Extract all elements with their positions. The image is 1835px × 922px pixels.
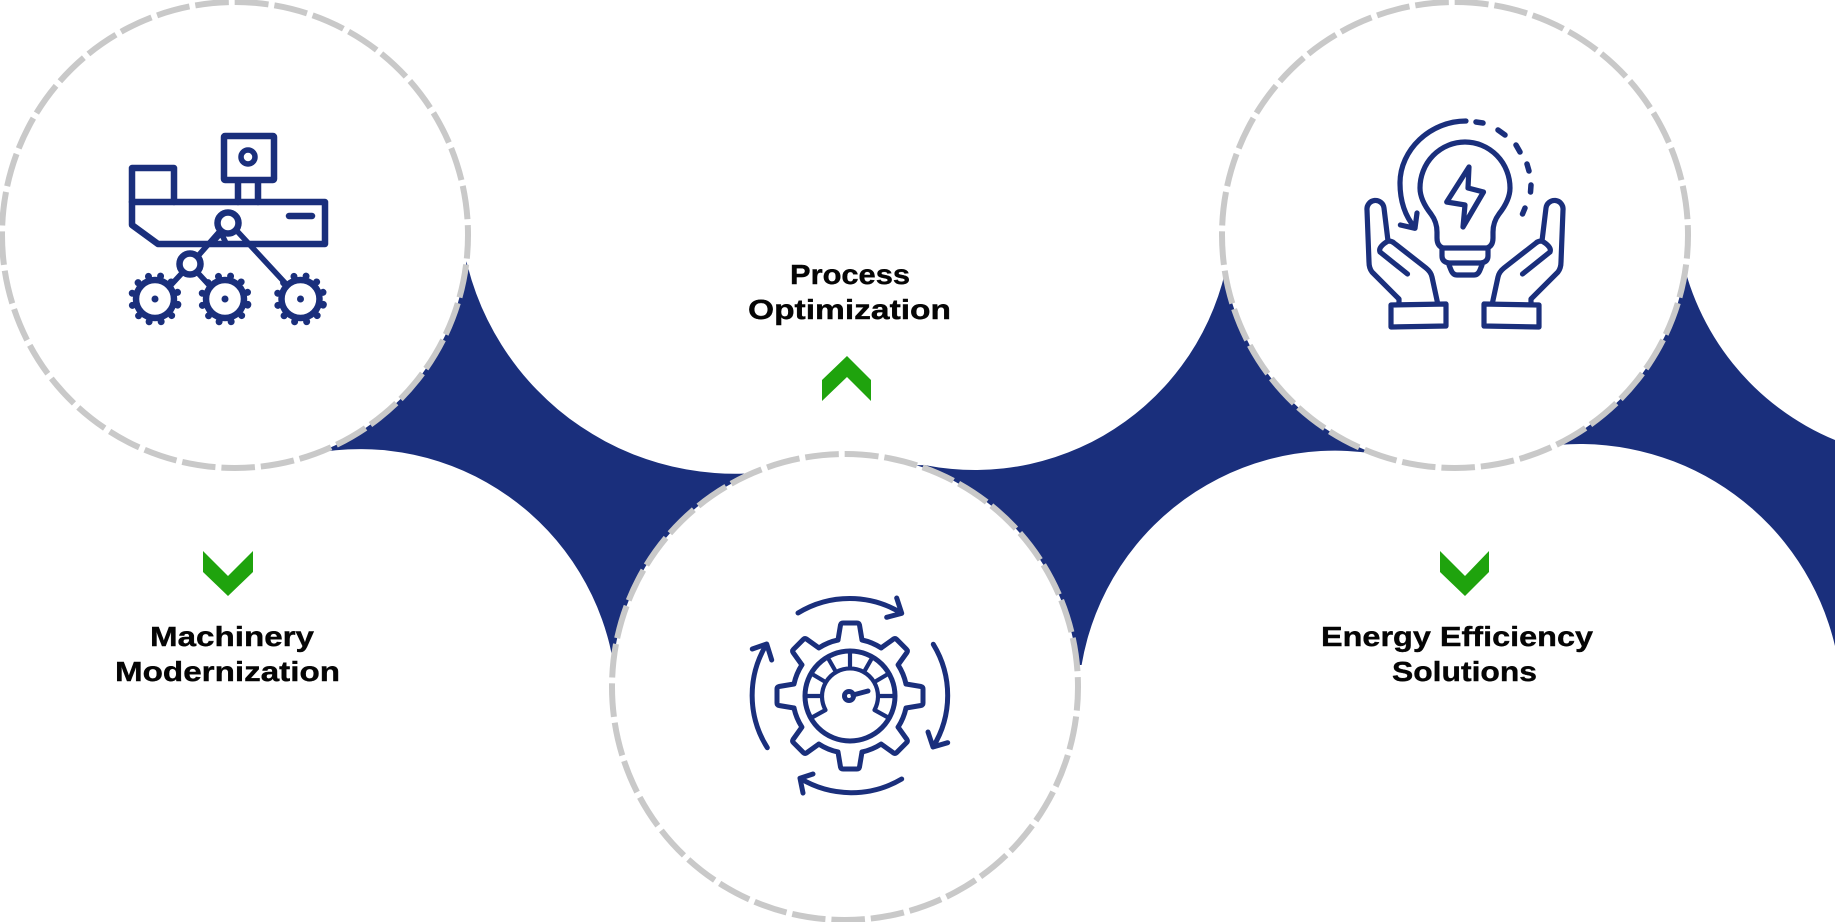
icon: gear with gauge and cycle arrows [752,598,948,793]
circle: machinery modernization [2,2,468,468]
label: Process Optimization: Optimization [748,294,951,325]
label: Process Optimization [748,259,951,325]
label: Energy Efficiency Solutions: Energy Efficiency [1321,621,1593,652]
chevron: process [822,356,871,401]
chevron: energy [1440,551,1489,596]
label: Machinery Modernization: Modernization [115,656,340,687]
circle: process optimization [612,454,1078,920]
label: Machinery Modernization: Machinery [150,621,315,652]
label: Process Optimization: Process [790,259,910,290]
circle: energy efficiency solutions [1222,2,1688,468]
icon: light bulb in hands [1367,121,1563,327]
navy wave band [310,238,1835,670]
label: Machinery Modernization [115,621,340,687]
label: Energy Efficiency Solutions: Solutions [1392,656,1537,687]
chevron: machinery [203,551,253,596]
label: Energy Efficiency Solutions [1321,621,1593,687]
icon: rover [126,136,329,328]
